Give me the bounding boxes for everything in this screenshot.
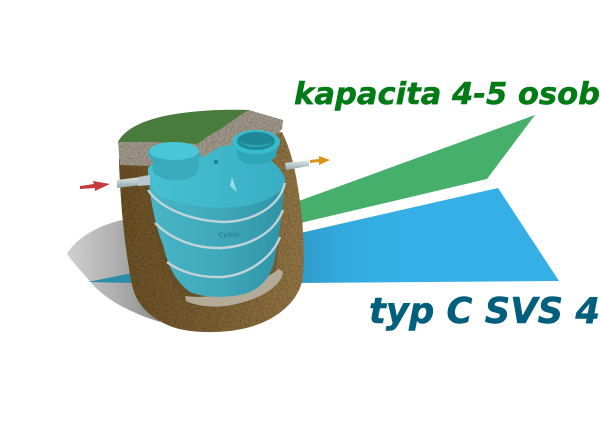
tank upper dome [148,145,285,208]
soil cut cavity shading [150,190,282,307]
concrete base slab [185,269,283,307]
grass [118,110,249,144]
blue ray tip [88,273,133,283]
tank body [148,156,285,297]
septic tank cutaway illustration [117,110,309,332]
gravel layer [118,110,283,170]
open manhole collar [232,130,280,165]
soil body [119,132,304,332]
inlet arrow [80,181,110,191]
vent hole [214,160,218,164]
reinforcement rings [148,183,285,277]
ground shadow [67,219,160,322]
outlet pipe [285,160,309,170]
green ray [296,115,535,224]
closed manhole cover [148,142,200,180]
outlet arrow [310,156,330,165]
title: capacity: kapacita 4-5 osob [294,77,600,112]
subtitle: type: typ C SVS 4 [369,291,600,332]
tank fin [230,177,237,192]
tank logo: Cyklo [218,231,240,239]
blue ray [296,188,559,283]
inlet pipe [117,175,150,188]
